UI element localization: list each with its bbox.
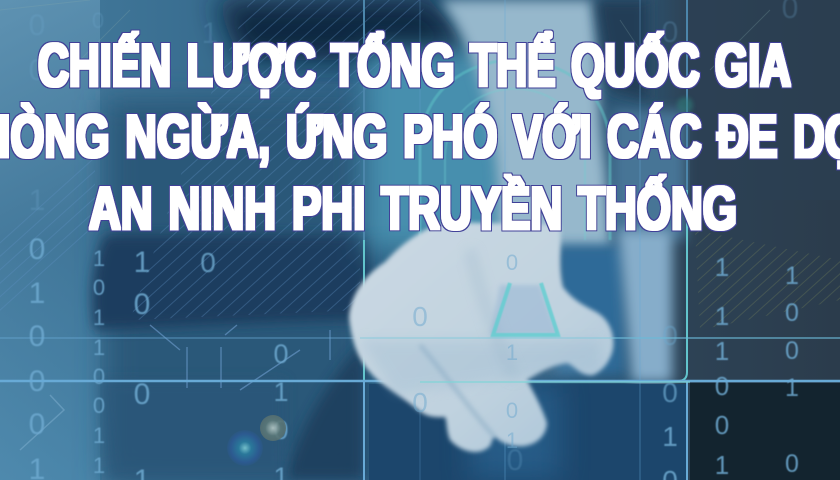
binary digits: 0 <box>662 320 678 351</box>
binary digits: 0 <box>29 54 45 87</box>
binary digits: 0 <box>29 408 45 441</box>
digits over the hand: 0 <box>412 387 428 418</box>
digits over the hand: 1 <box>506 340 518 365</box>
binary digits: 0 <box>715 371 729 401</box>
lock keyhole <box>360 283 840 338</box>
binary digits: 1 <box>785 374 799 402</box>
binary digits: 0 <box>273 339 289 369</box>
binary digits: 0 <box>93 364 105 389</box>
digits over the hand <box>412 250 518 453</box>
binary digits: 0 <box>785 450 799 478</box>
binary digits: 0 <box>273 415 289 445</box>
binary digits: 1 <box>29 184 45 217</box>
binary digits: 0 <box>29 320 45 353</box>
binary digits: 0 <box>662 16 678 49</box>
title: national strategy heading <box>0 32 840 242</box>
binary digits: 1 <box>29 277 45 310</box>
binary digits: 0 <box>134 288 150 321</box>
digits over the hand: 1 <box>506 428 518 453</box>
binary digits: 0 <box>92 8 104 33</box>
lens flares <box>227 97 693 466</box>
binary digits: 1 <box>715 252 729 282</box>
padlock outline <box>364 60 687 381</box>
binary digits: 0 <box>785 299 799 327</box>
binary digits: 0 <box>29 365 45 398</box>
binary digits: 0 <box>785 337 799 365</box>
binary digits: 1 <box>715 301 729 331</box>
binary digits: 0 <box>662 377 678 408</box>
binary digits: 0 <box>29 9 45 42</box>
binary digits: 1 <box>202 17 218 50</box>
hand pointing at the lock <box>349 222 690 452</box>
binary digits: 0 <box>93 393 105 418</box>
binary digits: 0 <box>200 247 216 278</box>
binary digits: 1 <box>715 336 729 366</box>
digits over the hand: 0 <box>506 250 518 275</box>
binary digits: 1 <box>93 305 105 330</box>
binary digits: 0 <box>134 378 150 411</box>
binary digits: 1 <box>93 423 105 448</box>
binary digits: 1 <box>93 246 105 271</box>
binary digits: 1 <box>93 453 105 478</box>
binary digits: 0 <box>29 233 45 266</box>
digits over the hand: 0 <box>412 301 428 332</box>
digits over the hand: 0 <box>506 398 518 423</box>
binary digits: 0 <box>507 444 523 477</box>
binary digits: 1 <box>93 335 105 360</box>
binary digits: 1 <box>715 450 729 480</box>
binary digits: 1 <box>273 377 289 407</box>
binary digits: 1 <box>785 262 799 290</box>
binary digits: 1 <box>134 246 150 279</box>
binary digits: 0 <box>715 410 729 440</box>
binary digits: 0 <box>93 275 105 300</box>
binary digits: 1 <box>662 421 678 452</box>
